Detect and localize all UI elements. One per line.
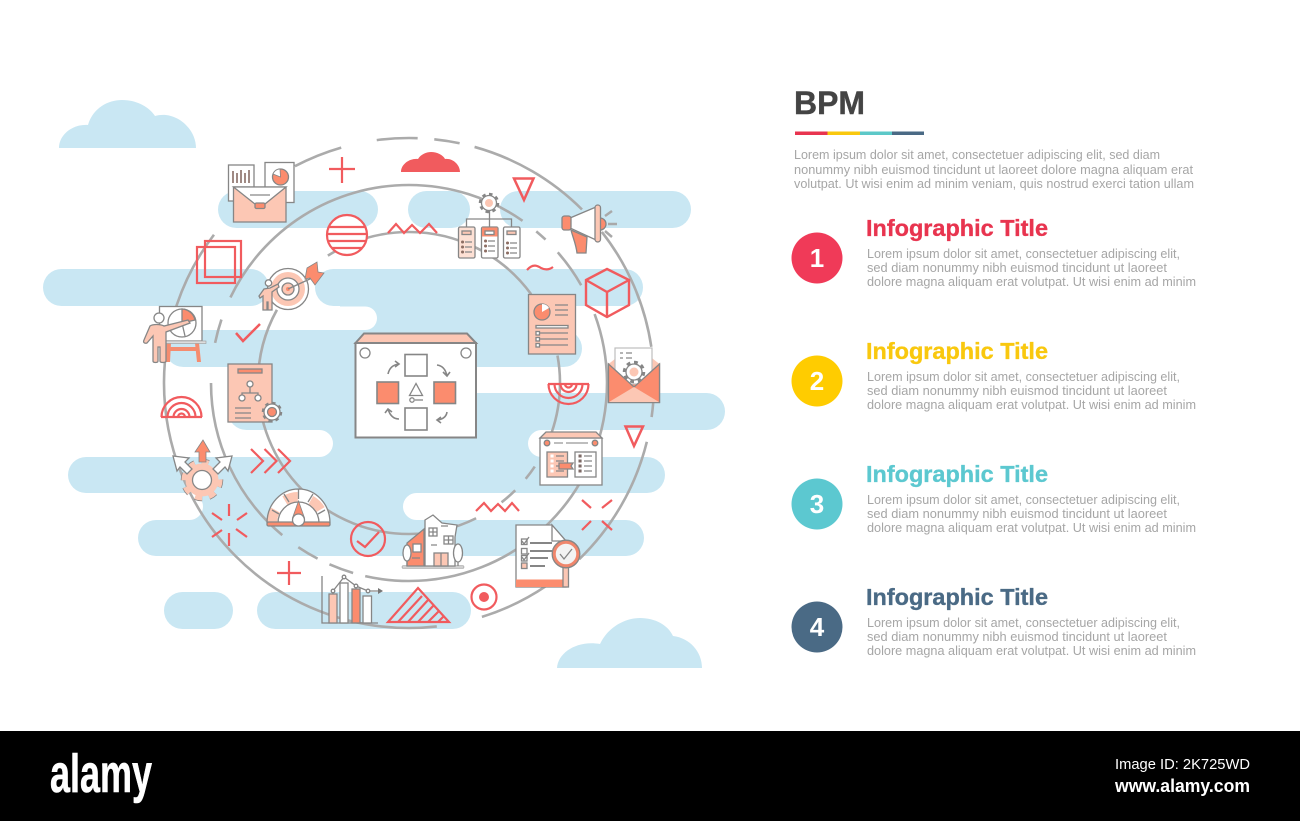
item 4: 4 xyxy=(810,612,825,642)
icon: org chart with gear xyxy=(458,194,520,258)
icon: red squiggle xyxy=(527,266,553,270)
tricolour divider xyxy=(795,132,924,135)
item 4: sed diam nonummy nibh euismod tincidunt ut laoreet xyxy=(867,630,1168,644)
item 1: Infographic Title xyxy=(866,215,1048,241)
icon: red double squares xyxy=(197,241,241,283)
icon: red check xyxy=(236,324,260,341)
icon: red plus xyxy=(329,157,355,183)
icon: envelope with gear xyxy=(608,348,660,402)
intro paragraph xyxy=(794,148,1194,191)
icon: red burst xyxy=(212,504,247,546)
footer bar: alamy xyxy=(50,744,152,804)
item 1: sed diam nonummy nibh euismod tincidunt ut laoreet xyxy=(867,261,1168,275)
concentric dashed rings xyxy=(164,138,654,628)
item 2: Infographic Title xyxy=(866,338,1048,364)
icon: house xyxy=(402,515,464,568)
item 2: sed diam nonummy nibh euismod tincidunt ut laoreet xyxy=(867,384,1168,398)
item 4: dolore magna aliquam erat volutpat. Ut wisi enim ad minim xyxy=(867,644,1196,658)
icon: red chevrons xyxy=(251,449,290,473)
item 3: dolore magna aliquam erat volutpat. Ut wisi enim ad minim xyxy=(867,521,1196,535)
intro paragraph: nonummy nibh euismod tincidunt ut laoreet dolore magna aliquam erat xyxy=(794,163,1194,177)
icon: report document xyxy=(528,294,576,354)
item 4: Lorem ipsum dolor sit amet, consectetuer adipiscing elit, xyxy=(867,616,1180,630)
icon: red x burst xyxy=(582,500,612,530)
item 3: sed diam nonummy nibh euismod tincidunt ut laoreet xyxy=(867,507,1168,521)
icon: presenter at easel xyxy=(144,306,206,362)
icon: red check circle xyxy=(351,522,385,556)
icon: red rainbow xyxy=(161,397,202,417)
item 2: dolore magna aliquam erat volutpat. Ut wisi enim ad minim xyxy=(867,398,1196,412)
item 1: Lorem ipsum dolor sit amet, consectetuer adipiscing elit, xyxy=(867,247,1180,261)
icon: striped circle xyxy=(327,215,367,255)
footer bar xyxy=(0,731,1300,821)
item 3: 3 xyxy=(810,489,824,519)
item 3 xyxy=(792,461,1196,535)
icon: red cloud xyxy=(401,152,460,172)
central process board xyxy=(356,334,476,438)
background blobs and clouds xyxy=(0,100,828,668)
icon: gear with arrows xyxy=(173,440,232,497)
icon: document with org chart and gear xyxy=(228,364,280,422)
item 3: Infographic Title xyxy=(866,461,1048,487)
item 2 xyxy=(792,338,1196,412)
footer bar: www.alamy.com xyxy=(1114,776,1250,796)
item 1: 1 xyxy=(810,243,824,273)
icon: red target circle xyxy=(472,584,496,610)
item 1: dolore magna aliquam erat volutpat. Ut wisi enim ad minim xyxy=(867,275,1196,289)
icon: megaphone xyxy=(562,205,617,253)
icon: target with dart and person xyxy=(259,262,324,310)
icon: gauge xyxy=(267,489,330,526)
icon: envelope with charts xyxy=(228,162,294,222)
item 2: Lorem ipsum dolor sit amet, consectetuer adipiscing elit, xyxy=(867,370,1180,384)
icon: red plus bottom xyxy=(277,561,301,585)
intro paragraph: Lorem ipsum dolor sit amet, consectetuer adipiscing elit, sed diam xyxy=(794,148,1160,162)
icon: cube xyxy=(586,269,629,317)
icon: red triangle right xyxy=(626,426,643,446)
intro paragraph: volutpat. Ut wisi enim ad minim veniam, quis nostrud exerci tation ullam xyxy=(794,177,1194,191)
item 1 xyxy=(792,215,1196,289)
item 4: Infographic Title xyxy=(866,584,1048,610)
icon: checklist with magnifier xyxy=(516,525,580,587)
icon: browser window with lists xyxy=(540,432,602,485)
item 3: Lorem ipsum dolor sit amet, consectetuer adipiscing elit, xyxy=(867,493,1180,507)
footer bar: Image ID: 2K725WD xyxy=(1115,756,1250,773)
item 4 xyxy=(792,584,1196,658)
heading: BPM: BPM xyxy=(794,85,865,121)
icon: red half circle xyxy=(548,384,589,404)
icon: red triangle top xyxy=(514,178,534,200)
icon: hatched triangle xyxy=(388,588,449,622)
icon: bar chart xyxy=(322,575,383,623)
icon: red zigzag bottom xyxy=(476,503,519,511)
item 2: 2 xyxy=(810,366,824,396)
icon: red zigzag top xyxy=(388,224,437,233)
